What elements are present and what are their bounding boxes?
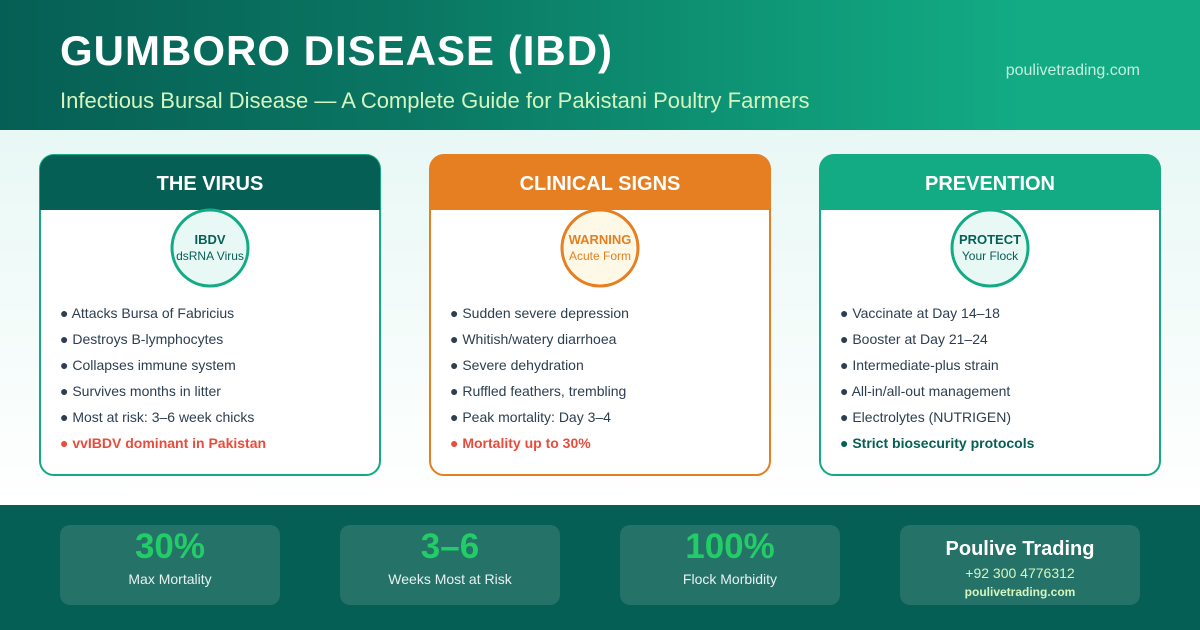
list: clinical signs: ● Severe dehydration xyxy=(450,357,584,373)
stat: weeks most at risk: 3–6 xyxy=(421,527,479,566)
icon: protect badge: Your Flock xyxy=(962,249,1018,263)
website: poulivetrading.com xyxy=(1006,62,1140,79)
panel heading: the virus: THE VIRUS xyxy=(157,173,263,195)
panel heading: clinical signs: CLINICAL SIGNS xyxy=(520,173,680,195)
list: virus facts: ● Collapses immune system xyxy=(60,357,236,373)
list: clinical signs xyxy=(450,305,629,451)
icon: warning badge: WARNING xyxy=(569,232,631,247)
contact box: poulivetrading.com xyxy=(965,585,1075,599)
header banner xyxy=(0,0,1200,130)
stat: flock morbidity: 100% xyxy=(685,527,775,566)
footer band xyxy=(0,505,1200,630)
icon: warning badge: Acute Form xyxy=(569,249,631,263)
list: virus facts: ● Attacks Bursa of Fabricius xyxy=(60,305,234,321)
title: GUMBORO DISEASE (IBD) xyxy=(60,27,613,74)
stat: weeks most at risk xyxy=(340,525,560,605)
stat: weeks most at risk: Weeks Most at Risk xyxy=(388,571,512,587)
stat: max mortality: 30% xyxy=(135,527,205,566)
list: prevention steps: ● Strict biosecurity protocols xyxy=(840,435,1034,451)
list: clinical signs: ● Sudden severe depression xyxy=(450,305,629,321)
list: prevention steps: ● Booster at Day 21–24 xyxy=(840,331,988,347)
stat: max mortality: Max Mortality xyxy=(128,571,212,587)
list: virus facts: ● Most at risk: 3–6 week chicks xyxy=(60,409,254,425)
icon: warning badge xyxy=(560,210,640,288)
contact box: Poulive Trading xyxy=(946,538,1094,560)
icon: protect badge: PROTECT xyxy=(959,232,1021,247)
list: prevention steps: ● Electrolytes (NUTRIGEN) xyxy=(840,409,1011,425)
panel heading: prevention: PREVENTION xyxy=(925,173,1055,195)
list: prevention steps: ● Vaccinate at Day 14–18 xyxy=(840,305,1000,321)
icon: IBDV badge: IBDV xyxy=(194,232,226,247)
list: clinical signs: ● Ruffled feathers, trembling xyxy=(450,383,626,399)
contact box xyxy=(900,525,1140,605)
list: clinical signs: ● Whitish/watery diarrhoea xyxy=(450,331,616,347)
list: prevention steps: ● All-in/all-out management xyxy=(840,383,1010,399)
list: clinical signs: ● Peak mortality: Day 3–4 xyxy=(450,409,611,425)
list: prevention steps xyxy=(840,305,1034,451)
list: prevention steps: ● Intermediate-plus strain xyxy=(840,357,999,373)
list: virus facts: ● vvIBDV dominant in Pakistan xyxy=(60,435,266,451)
icon: IBDV badge xyxy=(170,208,250,288)
list: clinical signs: ● Mortality up to 30% xyxy=(450,435,591,451)
contact box: +92 300 4776312 xyxy=(965,565,1075,581)
panel: the virus xyxy=(39,154,381,476)
list: virus facts: ● Survives months in litter xyxy=(60,383,221,399)
list: virus facts xyxy=(60,305,266,451)
stat: max mortality xyxy=(60,525,280,605)
subtitle: Infectious Bursal Disease — A Complete Guide for Pakistani Poultry Farmers xyxy=(60,88,810,113)
icon: IBDV badge: dsRNA Virus xyxy=(176,249,244,263)
stat: flock morbidity xyxy=(620,525,840,605)
stat: flock morbidity: Flock Morbidity xyxy=(683,571,777,587)
page background xyxy=(0,130,1200,505)
panel: prevention xyxy=(819,154,1161,476)
list: virus facts: ● Destroys B-lymphocytes xyxy=(60,331,223,347)
panel: clinical signs xyxy=(429,154,771,476)
icon: protect badge xyxy=(950,210,1030,288)
